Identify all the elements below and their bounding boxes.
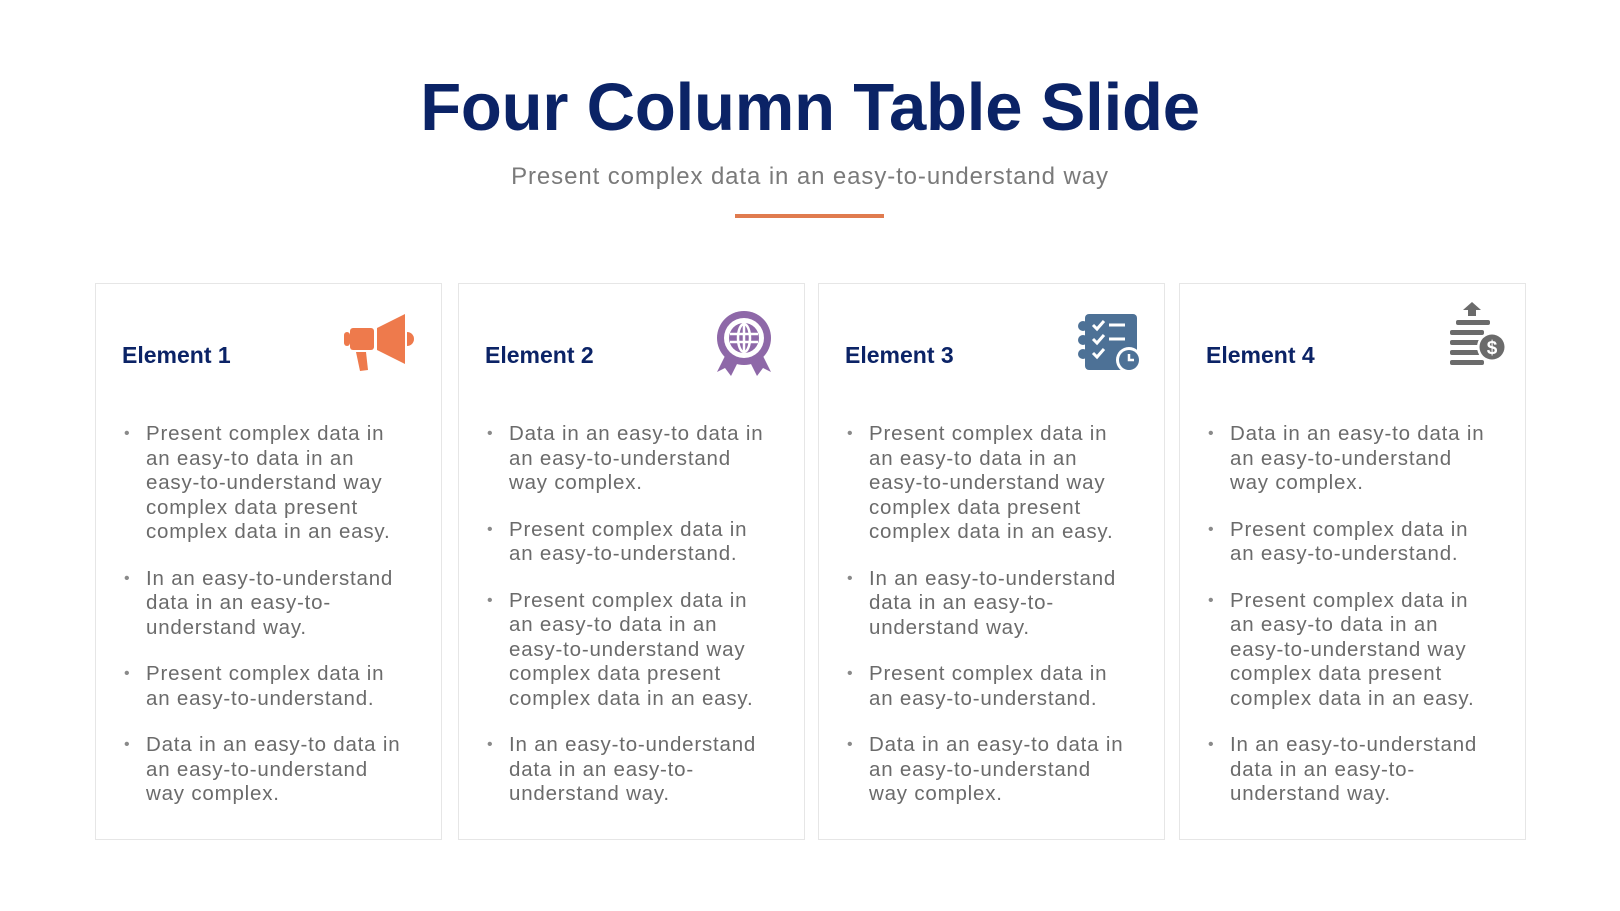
bullet list: easy-to-understand way [869, 471, 1105, 494]
bullet list: complex data present [146, 496, 358, 518]
bullet list: an easy-to-understand. [146, 686, 374, 710]
bullet list: Present complex data in [869, 422, 1107, 445]
bullet list: Present complex data in [509, 588, 747, 612]
bullet list: understand way. [1230, 782, 1391, 805]
bullet list: easy-to-understand way [509, 638, 745, 660]
bullet list: an easy-to data in an [509, 613, 717, 636]
bullet list: an easy-to-understand. [869, 686, 1097, 710]
bullet list: understand way. [869, 616, 1030, 638]
title: Four Column Table Slide [420, 70, 1200, 145]
bullet list: an easy-to-understand [869, 758, 1091, 780]
bullet list: data in an easy-to- [1230, 758, 1415, 780]
bullet list: Present complex data in [509, 518, 747, 540]
bullet list: In an easy-to-understand [869, 566, 1116, 590]
bullet list: understand way. [509, 782, 670, 805]
icon: globe award [717, 311, 771, 376]
bullet list: way complex. [1230, 471, 1364, 494]
bullet list: data in an easy-to- [509, 758, 694, 780]
bullet list: Present complex data in [1230, 518, 1468, 540]
bullet list: understand way. [146, 616, 307, 638]
bullet list: Data in an easy-to data in [1230, 422, 1484, 445]
panel: element 3 [818, 283, 1165, 840]
bullet list: way complex. [869, 782, 1003, 805]
bullet list: way complex. [509, 471, 643, 494]
icon: megaphone [344, 314, 414, 371]
bullet list: In an easy-to-understand [1230, 733, 1477, 756]
heading: element 2: Element 2 [485, 342, 594, 368]
heading: element 3: Element 3 [845, 342, 954, 368]
bullet list: complex data in an easy. [146, 520, 390, 543]
bullet list: easy-to-understand way [1230, 638, 1466, 660]
bullet list: Present complex data in [146, 662, 384, 685]
icon: checklist with clock [1078, 314, 1139, 370]
bullet list: an easy-to-understand. [1230, 542, 1458, 565]
bullet list: In an easy-to-understand [509, 733, 756, 756]
bullet list: complex data present [869, 496, 1081, 518]
bullet list: way complex. [146, 782, 280, 805]
bullet list [488, 422, 763, 805]
bullet list: an easy-to data in an [1230, 613, 1438, 636]
bullet list: data in an easy-to- [146, 591, 331, 614]
panel: element 4 [1179, 283, 1526, 840]
heading: element 4: Element 4 [1206, 342, 1315, 368]
bullet list: an easy-to data in an [146, 446, 354, 470]
accent underline [735, 214, 884, 218]
bullet list: an easy-to-understand [1230, 446, 1452, 470]
bullet list: Present complex data in [869, 662, 1107, 685]
bullet list: an easy-to-understand. [509, 542, 737, 565]
panel: element 2 [458, 283, 805, 840]
bullet list [848, 422, 1123, 805]
bullet list: Data in an easy-to data in [146, 733, 400, 756]
panel: element 1 [95, 283, 442, 840]
bullet list: an easy-to-understand [146, 758, 368, 780]
bullet list: In an easy-to-understand [146, 566, 393, 590]
bullet list: an easy-to-understand [509, 446, 731, 470]
icon: coin stack with dollar: $ [1487, 338, 1498, 359]
bullet list: complex data in an easy. [1230, 686, 1474, 710]
bullet list: complex data in an easy. [869, 520, 1113, 543]
bullet list: Data in an easy-to data in [869, 733, 1123, 756]
bullet list: complex data present [1230, 662, 1442, 685]
heading: element 1: Element 1 [122, 342, 231, 368]
bullet list: Data in an easy-to data in [509, 422, 763, 445]
bullet list: Present complex data in [1230, 588, 1468, 612]
bullet list: Present complex data in [146, 422, 384, 445]
bullet list [124, 422, 400, 805]
bullet list: complex data present [509, 662, 721, 685]
bullet list: an easy-to data in an [869, 446, 1077, 470]
icon: coin stack with dollar [1450, 302, 1504, 365]
bullet list: complex data in an easy. [509, 686, 753, 710]
bullet list: data in an easy-to- [869, 591, 1054, 614]
bullet list [1208, 422, 1484, 805]
subtitle: Present complex data in an easy-to-understand way [511, 163, 1109, 190]
bullet list: easy-to-understand way [146, 471, 382, 494]
